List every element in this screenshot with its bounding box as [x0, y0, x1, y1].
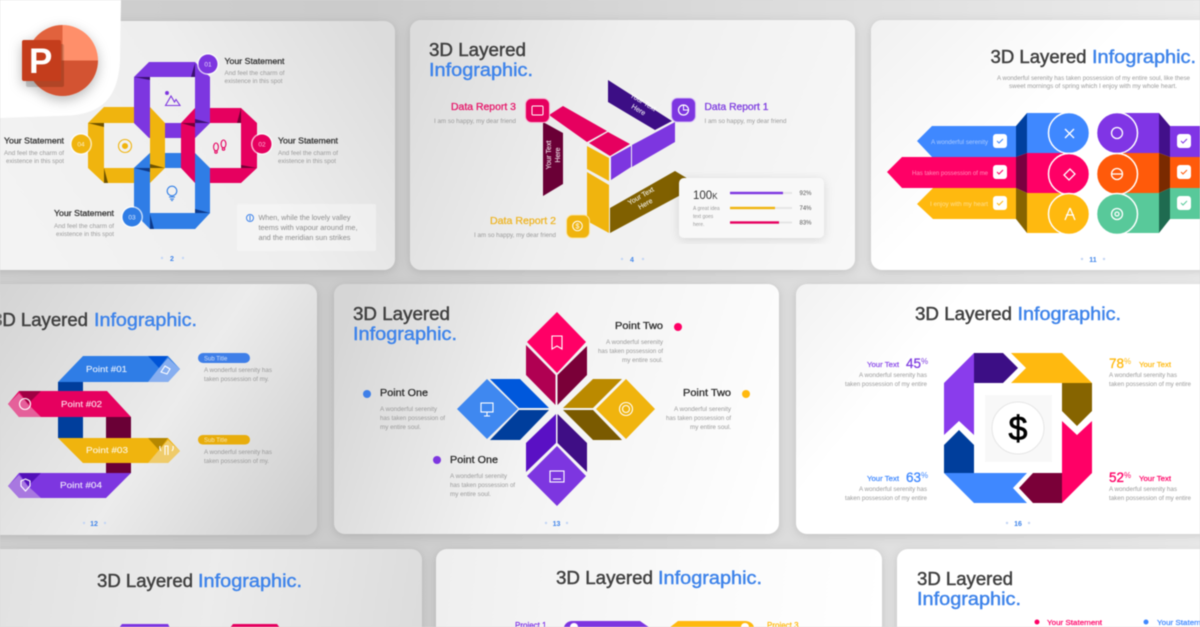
- ribbon labels: Point #02: [61, 400, 103, 409]
- badge: 01: 01: [204, 62, 212, 68]
- ribbon labels: Point #01: [86, 365, 128, 374]
- label: data report 2: Data Report 2: [490, 216, 556, 227]
- panel: stats card: 100K: [693, 190, 718, 202]
- statement 03: Your Statement: [54, 209, 115, 218]
- stat 78%: %: [1124, 357, 1131, 366]
- icon: report 1: [672, 98, 696, 122]
- stat 78%: Your Text: [1139, 362, 1171, 369]
- statement 03: And feel the charm of: [54, 224, 114, 230]
- heading: 3D Layered: [990, 47, 1086, 67]
- point two top: Point Two: [615, 321, 663, 332]
- label: data report 1: [704, 102, 786, 125]
- label: data report 2: I am so happy, my dear friend: [474, 233, 556, 239]
- panel: slide 12 ribbon: [0, 284, 317, 535]
- stat 63%: A wonderful serenity has: [859, 487, 927, 493]
- heading: 3D Layered: [353, 304, 450, 324]
- statement 02: And feel the charm of: [278, 151, 338, 157]
- heading: Infographic.: [94, 310, 197, 330]
- label: data report 1: Data Report 1: [704, 102, 769, 113]
- diamond chart: [457, 312, 655, 506]
- stat 63%: 63: [906, 469, 921, 485]
- statement 01: Your Statement: [224, 57, 285, 66]
- point one left: A wonderful serenity: [380, 407, 437, 413]
- stat 52%: 52: [1109, 469, 1124, 485]
- bar: 74%: 74%: [800, 206, 812, 212]
- badge: 01: [197, 53, 219, 75]
- statement labels: [1034, 620, 1200, 627]
- rotated label purple: Your Text: [629, 92, 657, 113]
- point two right: has taken possession of: [666, 416, 731, 422]
- isometric chart: [543, 80, 690, 233]
- icon: PowerPoint logo: P: [29, 42, 52, 81]
- point two right: my entire soul.: [690, 425, 731, 431]
- icon circles: [1048, 112, 1138, 234]
- stat 52%: taken possession of my entire: [1109, 496, 1192, 502]
- statement 03: existence in this spot: [56, 232, 114, 238]
- stat 52%: Your Text: [1139, 476, 1171, 483]
- sub title 2: [198, 435, 272, 465]
- panel: bottom left slide: [0, 549, 422, 627]
- heading: Infographic.: [353, 324, 457, 344]
- pager 13: 13: [553, 521, 560, 528]
- rotated label maroon: Here: [555, 147, 562, 163]
- pager 12: 12: [90, 521, 98, 528]
- badge: 02: 02: [258, 142, 266, 148]
- partial shapes: [119, 624, 280, 627]
- pager 11: [1081, 257, 1105, 264]
- rotated label brown: Here: [637, 198, 654, 211]
- heading: 3D Layered: [917, 569, 1013, 589]
- sub title 2: taken possession of my.: [204, 459, 269, 465]
- point one left: Point One: [380, 388, 428, 399]
- corner tab with PowerPoint logo: [0, 0, 121, 118]
- panel: slide 11 arrows: [871, 20, 1200, 270]
- sub title 1: taken possession of my.: [204, 377, 269, 383]
- stat 52%: A wonderful serenity has: [1109, 487, 1177, 493]
- diamond icons: [481, 336, 632, 482]
- sub title 1: [198, 353, 272, 383]
- heading: 3D Layered: [556, 568, 653, 588]
- ribbon chart: [8, 356, 180, 498]
- label: data report 2: [474, 216, 556, 239]
- stat 45%: taken possession of my entire: [845, 382, 928, 388]
- heading: [353, 304, 457, 344]
- partial shapes: [564, 621, 754, 627]
- 3d block left: [1016, 113, 1069, 233]
- label: data report 3: I am so happy, my dear friend: [434, 119, 516, 125]
- bar: 92%: [730, 191, 812, 197]
- label: data report 3: Data Report 3: [451, 102, 516, 113]
- callout: info note: When, while the lovely valley: [258, 213, 351, 222]
- badge: 04: [70, 133, 92, 155]
- icon: report 2: $: [576, 224, 580, 230]
- point one bottom: A wonderful serenity: [450, 474, 507, 480]
- rotated label maroon: Your Text: [546, 141, 553, 169]
- stat 52%: %: [1124, 471, 1131, 480]
- badge: 04: 04: [77, 142, 85, 148]
- heading: [556, 568, 762, 588]
- heading: [915, 304, 1121, 324]
- badge: 02: [251, 133, 273, 155]
- intro text: [997, 76, 1191, 90]
- heading: Infographic.: [1018, 304, 1121, 324]
- panel: bottom right slide: [897, 549, 1200, 627]
- panel: bottom middle slide: [436, 549, 882, 627]
- bar: 92%: 92%: [800, 191, 812, 197]
- stat 78%: taken possession of my entire: [1109, 382, 1192, 388]
- stat 45%: 45: [906, 355, 921, 371]
- point one left: has taken possession of: [380, 416, 445, 422]
- icon: report 2: [566, 215, 590, 238]
- stat 52%: [1109, 469, 1192, 502]
- icon: mountains: [166, 92, 180, 106]
- pager 16: [1006, 521, 1030, 528]
- arrows right: [1170, 126, 1200, 219]
- heading: 3D Layered: [915, 304, 1012, 324]
- point two top: [598, 321, 682, 364]
- point two top: my entire soul.: [622, 358, 663, 364]
- point two top: A wonderful serenity: [606, 340, 663, 346]
- pager 4: 4: [630, 257, 634, 264]
- point one left: [363, 388, 445, 431]
- point one left: my entire soul.: [380, 425, 421, 431]
- callout: info note: and the meridian sun strikes: [258, 233, 351, 242]
- stat 63%: [845, 469, 928, 502]
- rotated label purple: Here: [630, 104, 647, 117]
- arrows left: Has taken possession of me: [912, 171, 989, 177]
- dollar emblem: [985, 395, 1052, 462]
- stat 78%: [1109, 355, 1192, 388]
- statement 04: [4, 136, 65, 165]
- heading: Infographic.: [429, 60, 533, 80]
- point one bottom: has taken possession of: [450, 483, 515, 489]
- point two right: Point Two: [683, 388, 731, 399]
- heading: [990, 47, 1196, 67]
- stat 63%: taken possession of my entire: [845, 496, 928, 502]
- pager 2: 2: [170, 256, 174, 263]
- callout: info note: [237, 204, 376, 251]
- panel: slide 13 diamonds: [334, 284, 779, 534]
- icon: target: [118, 140, 132, 152]
- point one bottom: Point One: [450, 455, 498, 466]
- stat 45%: Your Text: [867, 362, 899, 369]
- octagon chart: [944, 353, 1092, 503]
- icon: footprints: [214, 140, 226, 153]
- stat 78%: 78: [1109, 355, 1124, 371]
- statement 01: existence in this spot: [224, 79, 283, 85]
- heading: [917, 569, 1021, 609]
- pager 4: [621, 257, 644, 264]
- heading: [97, 571, 302, 591]
- point one bottom: my entire soul.: [450, 492, 491, 498]
- label: data report 3: [434, 102, 516, 125]
- rotated label brown: Your Text: [627, 186, 656, 207]
- heading: Infographic.: [198, 571, 302, 591]
- heading: Infographic.: [1092, 47, 1196, 67]
- arrows left: [887, 126, 1017, 219]
- sub title 1: A wonderful serenity has: [204, 368, 272, 374]
- ribbon tip icons: [20, 366, 173, 491]
- arrows left: I enjoy with my heart: [930, 202, 988, 208]
- icon: report 3: [526, 98, 550, 122]
- point one bottom: [433, 455, 515, 498]
- stat 45%: %: [921, 357, 928, 366]
- statement labels: Your Statement: [1047, 620, 1102, 627]
- statement 04: And feel the charm of: [4, 151, 64, 157]
- bar: 74%: [730, 206, 812, 212]
- statement 04: existence in this spot: [6, 159, 64, 165]
- panel: stats card: [679, 178, 824, 238]
- statement 04: Your Statement: [4, 136, 65, 146]
- stat 63%: Your Text: [867, 476, 899, 483]
- label: data report 1: I am so happy, my dear friend: [704, 119, 786, 125]
- badge: 03: [121, 206, 143, 228]
- ribbon labels: [60, 365, 129, 490]
- panel: stats card: text goes: [693, 214, 714, 220]
- sub title 2: A wonderful serenity has: [204, 450, 272, 456]
- pager 16: 16: [1014, 521, 1022, 528]
- pager 2: [161, 256, 184, 263]
- dollar emblem: $: [1009, 410, 1028, 448]
- panel: stats card: A great idea: [693, 206, 720, 212]
- heading: Infographic.: [917, 589, 1021, 609]
- point two right: A wonderful serenity: [674, 407, 731, 413]
- bar: 83%: [730, 220, 812, 226]
- stat 63%: %: [921, 471, 928, 480]
- statement 02: [278, 136, 339, 165]
- statement 02: existence in this spot: [278, 159, 336, 165]
- heading: [429, 40, 533, 80]
- checkboxes: [993, 134, 1191, 210]
- 3d block right: [1117, 113, 1170, 233]
- stat 45%: [845, 355, 928, 388]
- panel: stats card: here.: [693, 222, 704, 228]
- sub title 2: Sub Title: [204, 438, 228, 444]
- stat 45%: A wonderful serenity has: [859, 373, 927, 379]
- badge: 03: 03: [128, 214, 136, 222]
- panel: slide 2 woven rings: [0, 21, 395, 270]
- heading: 3D Layered: [97, 571, 193, 591]
- statement 01: [224, 57, 285, 85]
- icons in circles: [1064, 128, 1122, 220]
- bar: 83%: 83%: [800, 220, 812, 226]
- heading: Infographic.: [658, 568, 762, 588]
- icon: light bulb: [167, 186, 177, 200]
- pager 13: [545, 521, 568, 528]
- project labels: [515, 621, 799, 627]
- heading: [0, 310, 197, 330]
- point two right: [666, 388, 750, 431]
- sub title 1: Sub Title: [204, 356, 228, 362]
- heading: 3D Layered: [429, 40, 526, 60]
- panel: slide 4 isometric: [410, 20, 855, 270]
- panel: slide 16 dollar octagon: [796, 284, 1200, 534]
- intro text: sweet mornings of spring which I enjoy with my whole heart.: [1009, 84, 1177, 90]
- callout: info note: teems with vapour around me,: [258, 223, 358, 232]
- statement 03: [54, 209, 115, 238]
- ribbon labels: Point #03: [86, 446, 129, 455]
- rings chart: [88, 62, 257, 229]
- intro text: A wonderful serenity has taken possession of my entire soul, like these: [997, 76, 1191, 82]
- point two top: has taken possession of: [598, 349, 663, 355]
- statement 01: And feel the charm of: [224, 71, 285, 77]
- pager 12: [83, 521, 106, 528]
- pager 11: 11: [1089, 257, 1097, 264]
- ribbon labels: Point #04: [60, 481, 103, 490]
- arrows left: A wonderful serenity: [931, 140, 988, 146]
- stat 78%: A wonderful serenity has: [1109, 373, 1177, 379]
- statement 02: Your Statement: [278, 136, 339, 146]
